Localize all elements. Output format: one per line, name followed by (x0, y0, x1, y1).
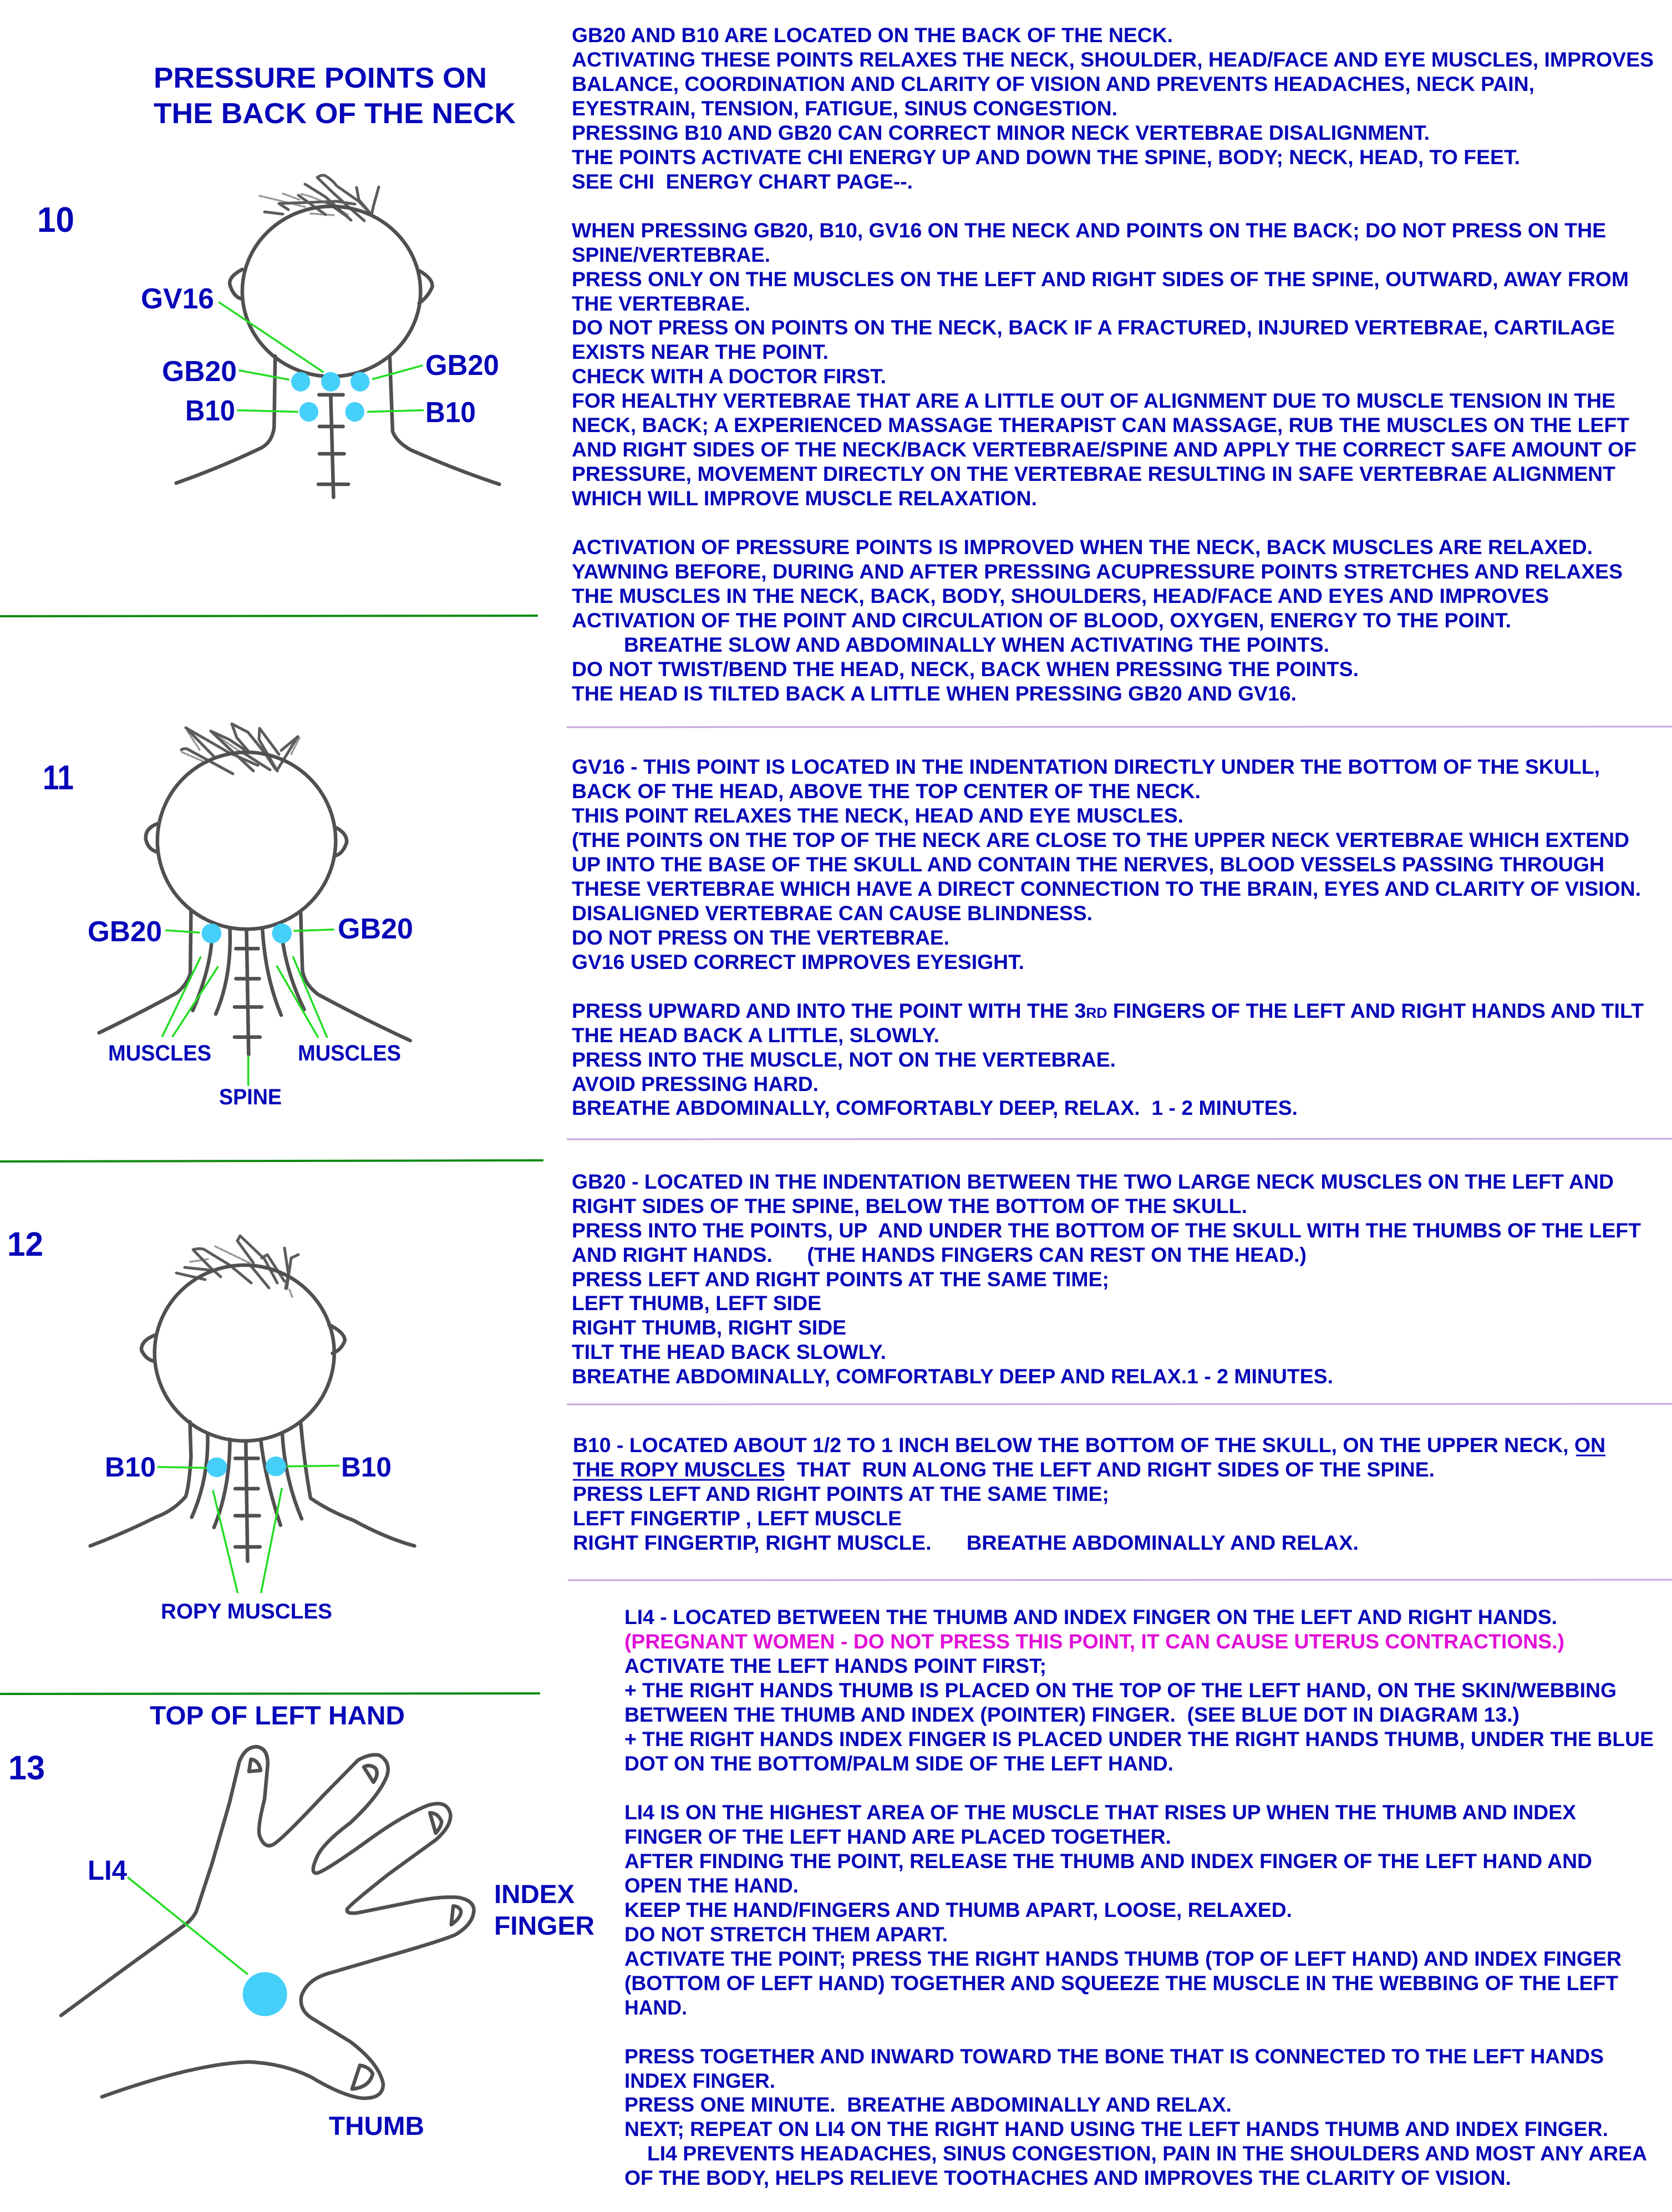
text block: LI4: NEXT; REPEAT ON LI4 ON THE RIGHT HAND USING THE LEFT HANDS THUMB AND INDEX FINGER. (624, 2118, 1608, 2140)
text block: overview of GB20 and B10: ACTIVATION OF PRESSURE POINTS IS IMPROVED WHEN THE NECK, BACK MUSCLES ARE RELAXED. (572, 536, 1593, 559)
text block: LI4: DOT ON THE BOTTOM/PALM SIDE OF THE LEFT HAND. (624, 1752, 1173, 1775)
text block: LI4: INDEX FINGER. (624, 2069, 775, 2092)
text block: overview of GB20 and B10: SEE CHI ENERGY CHART PAGE--. (572, 170, 913, 193)
text block: GB20: AND RIGHT HANDS. (THE HANDS FINGERS CAN REST ON THE HEAD.) (572, 1244, 1307, 1266)
panel: diagram 10 neck points (37, 175, 500, 498)
text block: B10: B10 - LOCATED ABOUT 1/2 TO 1 INCH BELOW THE BOTTOM OF THE SKULL, ON THE UPPER NECK, ON (573, 1434, 1605, 1457)
text block: B10: LEFT FINGERTIP , LEFT MUSCLE (573, 1507, 902, 1530)
text block: overview of GB20 and B10: THE POINTS ACTIVATE CHI ENERGY UP AND DOWN THE SPINE, BODY; NECK, HEAD, TO FEET. (572, 146, 1520, 169)
text block: overview of GB20 and B10: DO NOT PRESS ON POINTS ON THE NECK, BACK IF A FRACTURED, INJURED VERTEBRAE, CARTILAGE (572, 316, 1615, 339)
LI4 pressure point dot (243, 1972, 287, 2016)
text block: GV16: GV16 - THIS POINT IS LOCATED IN THE INDENTATION DIRECTLY UNDER THE BOTTOM OF THE SKULL, (572, 755, 1600, 778)
text block: GV16: UP INTO THE BASE OF THE SKULL AND CONTAIN THE NERVES, BLOOD VESSELS PASSING THROUGH (572, 853, 1604, 876)
text block: overview of GB20 and B10: THE VERTEBRAE. (572, 292, 750, 315)
text block: GV16: PRESS INTO THE MUSCLE, NOT ON THE VERTEBRAE. (572, 1048, 1116, 1071)
text block: overview of GB20 and B10: FOR HEALTHY VERTEBRAE THAT ARE A LITTLE OUT OF ALIGNMENT DUE TO MUSCLE TENSION IN THE (572, 389, 1615, 412)
text block: overview of GB20 and B10: GB20 AND B10 ARE LOCATED ON THE BACK OF THE NECK. (572, 24, 1173, 47)
text block: overview of GB20 and B10: AND RIGHT SIDES OF THE NECK/BACK VERTEBRAE/SPINE AND APPLY THE CORRECT SAFE AMOUNT OF (572, 438, 1637, 461)
text block: LI4: ACTIVATE THE LEFT HANDS POINT FIRST; (624, 1655, 1046, 1677)
leader lines (157, 1465, 339, 1593)
point labels: B10 (425, 397, 476, 429)
text block: LI4: AFTER FINDING THE POINT, RELEASE THE THUMB AND INDEX FINGER OF THE LEFT HAND AND (624, 1850, 1592, 1873)
text block: overview of GB20 and B10: PRESS ONLY ON THE MUSCLES ON THE LEFT AND RIGHT SIDES OF THE SPINE, OUTWARD, AWAY FROM (572, 268, 1629, 291)
text block: GV16: THIS POINT RELAXES THE NECK, HEAD AND EYE MUSCLES. (572, 804, 1183, 827)
text block: GV16: (THE POINTS ON THE TOP OF THE NECK ARE CLOSE TO THE UPPER NECK VERTEBRAE WHICH EXTEND (572, 829, 1629, 851)
hair sketch (260, 175, 379, 221)
text block: GV16 (572, 755, 1644, 1119)
point and muscle labels (88, 913, 413, 1109)
point labels: GB20 (425, 349, 499, 382)
diagram heading: TOP OF LEFT HAND (150, 1701, 405, 1730)
panel: diagram 13 left hand (8, 1701, 594, 2140)
text block: LI4: LI4 IS ON THE HIGHEST AREA OF THE MUSCLE THAT RISES UP WHEN THE THUMB AND INDEX (624, 1801, 1576, 1824)
pregnancy warning: (PREGNANT WOMEN - DO NOT PRESS THIS POINT, IT CAN CAUSE UTERUS CONTRACTIONS.) (624, 1630, 1564, 1653)
pressure point dots (206, 1457, 286, 1477)
text block: LI4: HAND. (624, 1996, 687, 2019)
panel: diagram 11 GB20 (43, 724, 413, 1109)
point labels (141, 283, 499, 429)
head and neck drawing (99, 752, 410, 1086)
point and muscle labels: B10 (105, 1452, 156, 1483)
point and muscle labels: B10 (341, 1452, 392, 1483)
text block: LI4: OPEN THE HAND. (624, 1874, 799, 1897)
hand labels: LI4 (88, 1855, 127, 1886)
LI4 leader line (128, 1877, 248, 1975)
head and neck drawing (176, 206, 500, 498)
hand labels (88, 1855, 594, 2140)
text block: LI4: DO NOT STRETCH THEM APART. (624, 1923, 948, 1946)
text block: LI4: KEEP THE HAND/FINGERS AND THUMB APART, LOOSE, RELAXED. (624, 1899, 1292, 1921)
text block: LI4: + THE RIGHT HANDS INDEX FINGER IS PLACED UNDER THE RIGHT HANDS THUMB, UNDER THE BLUE (624, 1728, 1654, 1751)
text block: LI4: (BOTTOM OF LEFT HAND) TOGETHER AND SQUEEZE THE MUSCLE IN THE WEBBING OF THE LEFT (624, 1972, 1618, 1995)
text block: overview of GB20 and B10: PRESSING B10 AND GB20 CAN CORRECT MINOR NECK VERTEBRAE DISALIGNMENT. (572, 121, 1430, 144)
diagram number 13: 13 (8, 1749, 45, 1787)
text block: GV16: BREATHE ABDOMINALLY, COMFORTABLY DEEP, RELAX. 1 - 2 MINUTES. (572, 1097, 1298, 1119)
text block: B10: THE ROPY MUSCLES THAT RUN ALONG THE LEFT AND RIGHT SIDES OF THE SPINE. (573, 1458, 1435, 1481)
text block: B10: RIGHT FINGERTIP, RIGHT MUSCLE. BREATHE ABDOMINALLY AND RELAX. (573, 1531, 1359, 1554)
point and muscle labels: ROPY MUSCLES (161, 1600, 332, 1624)
text block: overview of GB20 and B10: DO NOT TWIST/BEND THE HEAD, NECK, BACK WHEN PRESSING THE POINTS. (572, 658, 1359, 681)
hair sketch (181, 724, 299, 774)
point and muscle labels: GB20 (338, 913, 413, 945)
text block: GB20: PRESS INTO THE POINTS, UP AND UNDER THE BOTTOM OF THE SKULL WITH THE THUMBS OF THE LEFT (572, 1219, 1641, 1242)
text block: overview of GB20 and B10: WHICH WILL IMPROVE MUSCLE RELAXATION. (572, 487, 1037, 510)
panel: diagram 12 B10 (7, 1225, 415, 1624)
text block: LI4: LI4 - LOCATED BETWEEN THE THUMB AND INDEX FINGER ON THE LEFT AND RIGHT HANDS. (624, 1606, 1557, 1628)
text block: GV16: PRESS UPWARD AND INTO THE POINT WITH THE 3 RD FINGERS OF THE LEFT AND RIGHT HANDS AND TILT (572, 1000, 1644, 1022)
text block: LI4: BETWEEN THE THUMB AND INDEX (POINTER) FINGER. (SEE BLUE DOT IN DIAGRAM 13.) (624, 1703, 1519, 1726)
leader lines (162, 930, 334, 1086)
diagram number 11: 11 (43, 759, 74, 797)
text block: LI4: ACTIVATE THE POINT; PRESS THE RIGHT HANDS THUMB (TOP OF LEFT HAND) AND INDEX FINGER (624, 1947, 1622, 1970)
text block: overview of GB20 and B10: CHECK WITH A DOCTOR FIRST. (572, 365, 886, 388)
leader lines (218, 302, 424, 412)
text block: overview of GB20 and B10: BREATHE SLOW AND ABDOMINALLY WHEN ACTIVATING THE POINTS. (624, 633, 1329, 656)
point labels: GV16 (141, 283, 214, 315)
text block: GB20 (572, 1170, 1641, 1388)
hand labels: INDEX (494, 1879, 575, 1909)
title: THE BACK OF THE NECK (154, 98, 516, 130)
point labels: GB20 (162, 356, 237, 388)
text block: GV16: THESE VERTEBRAE WHICH HAVE A DIRECT CONNECTION TO THE BRAIN, EYES AND CLARITY OF VISION. (572, 877, 1641, 900)
text block: overview of GB20 and B10 (572, 24, 1654, 705)
title: PRESSURE POINTS ON (154, 62, 487, 94)
text block: overview of GB20 and B10: ACTIVATION OF THE POINT AND CIRCULATION OF BLOOD, OXYGEN, ENERGY TO THE POINT. (572, 609, 1511, 632)
pressure point dots (291, 372, 370, 422)
point and muscle labels: SPINE (219, 1085, 282, 1109)
text block: GB20: RIGHT THUMB, RIGHT SIDE (572, 1316, 846, 1339)
text block: overview of GB20 and B10: PRESSURE, MOVEMENT DIRECTLY ON THE VERTEBRAE RESULTING IN SAFE VERTEBRAE ALIGNMENT (572, 463, 1615, 485)
hand labels: THUMB (329, 2111, 424, 2140)
text block: overview of GB20 and B10: ACTIVATING THESE POINTS RELAXES THE NECK, SHOULDER, HEAD/FACE AND EYE MUSCLES, IMPROVES (572, 48, 1654, 71)
text block: overview of GB20 and B10: THE MUSCLES IN THE NECK, BACK, BODY, SHOULDERS, HEAD/FACE AND EYES AND IMPROVES (572, 585, 1549, 607)
hand drawing (61, 1747, 474, 2098)
diagram number 12: 12 (7, 1225, 43, 1263)
point and muscle labels (105, 1452, 392, 1624)
hair sketch (176, 1236, 298, 1297)
hand labels: FINGER (494, 1911, 594, 1940)
title (154, 62, 516, 130)
text block: LI4: PRESS TOGETHER AND INWARD TOWARD THE BONE THAT IS CONNECTED TO THE LEFT HANDS (624, 2045, 1604, 2068)
text block: GV16: THE HEAD BACK A LITTLE, SLOWLY. (572, 1024, 939, 1047)
text block: LI4: FINGER OF THE LEFT HAND ARE PLACED TOGETHER. (624, 1825, 1171, 1848)
text block: GV16: GV16 USED CORRECT IMPROVES EYESIGHT. (572, 951, 1024, 973)
diagram number 10: 10 (37, 200, 74, 240)
text block: GB20: RIGHT SIDES OF THE SPINE, BELOW THE BOTTOM OF THE SKULL. (572, 1195, 1247, 1217)
point and muscle labels: MUSCLES (108, 1041, 211, 1066)
text block: B10: PRESS LEFT AND RIGHT POINTS AT THE SAME TIME; (573, 1483, 1109, 1505)
text block: LI4: PRESS ONE MINUTE. BREATHE ABDOMINALLY AND RELAX. (624, 2093, 1232, 2116)
point labels: B10 (185, 395, 235, 427)
text block: GB20: GB20 - LOCATED IN THE INDENTATION BETWEEN THE TWO LARGE NECK MUSCLES ON THE LEFT AND (572, 1170, 1614, 1193)
text block: overview of GB20 and B10: THE HEAD IS TILTED BACK A LITTLE WHEN PRESSING GB20 AND GV16. (572, 682, 1297, 705)
point and muscle labels: GB20 (88, 916, 162, 948)
text block: GV16: DISALIGNED VERTEBRAE CAN CAUSE BLINDNESS. (572, 902, 1092, 925)
pressure point dots (202, 924, 292, 943)
text block: GV16: BACK OF THE HEAD, ABOVE THE TOP CENTER OF THE NECK. (572, 780, 1201, 803)
text block: LI4: + THE RIGHT HANDS THUMB IS PLACED ON THE TOP OF THE LEFT HAND, ON THE SKIN/WEBBING (624, 1679, 1617, 1702)
text block: GV16: DO NOT PRESS ON THE VERTEBRAE. (572, 926, 949, 949)
text block: LI4: OF THE BODY, HELPS RELIEVE TOOTHACHES AND IMPROVES THE CLARITY OF VISION. (624, 2167, 1511, 2189)
text block: GV16: AVOID PRESSING HARD. (572, 1073, 819, 1095)
text block: overview of GB20 and B10: BALANCE, COORDINATION AND CLARITY OF VISION AND PREVENTS HEADACHES, NECK PAIN, (572, 73, 1534, 95)
text block: B10 (573, 1434, 1605, 1554)
text block: GB20: BREATHE ABDOMINALLY, COMFORTABLY DEEP AND RELAX.1 - 2 MINUTES. (572, 1365, 1333, 1388)
text block: overview of GB20 and B10: WHEN PRESSING GB20, B10, GV16 ON THE NECK AND POINTS ON THE BACK; DO NOT PRESS ON THE (572, 219, 1606, 242)
text block: overview of GB20 and B10: YAWNING BEFORE, DURING AND AFTER PRESSING ACUPRESSURE POINTS STRETCHES AND RELAXES (572, 560, 1623, 583)
head and neck drawing (90, 1265, 415, 1593)
text block: overview of GB20 and B10: EYESTRAIN, TENSION, FATIGUE, SINUS CONGESTION. (572, 97, 1117, 120)
text block: LI4: LI4 PREVENTS HEADACHES, SINUS CONGESTION, PAIN IN THE SHOULDERS AND MOST ANY AREA (647, 2142, 1647, 2165)
point and muscle labels: MUSCLES (298, 1041, 401, 1066)
text block: GB20: LEFT THUMB, LEFT SIDE (572, 1292, 821, 1315)
text block: overview of GB20 and B10: EXISTS NEAR THE POINT. (572, 341, 829, 363)
text block: LI4 (624, 1606, 1654, 2189)
text block: GB20: TILT THE HEAD BACK SLOWLY. (572, 1341, 886, 1363)
text block: overview of GB20 and B10: NECK, BACK; A EXPERIENCED MASSAGE THERAPIST CAN MASSAGE, RUB THE MUSCLES ON THE LEFT (572, 414, 1629, 437)
text block: overview of GB20 and B10: SPINE/VERTEBRAE. (572, 243, 770, 266)
text block: GB20: PRESS LEFT AND RIGHT POINTS AT THE SAME TIME; (572, 1268, 1109, 1291)
